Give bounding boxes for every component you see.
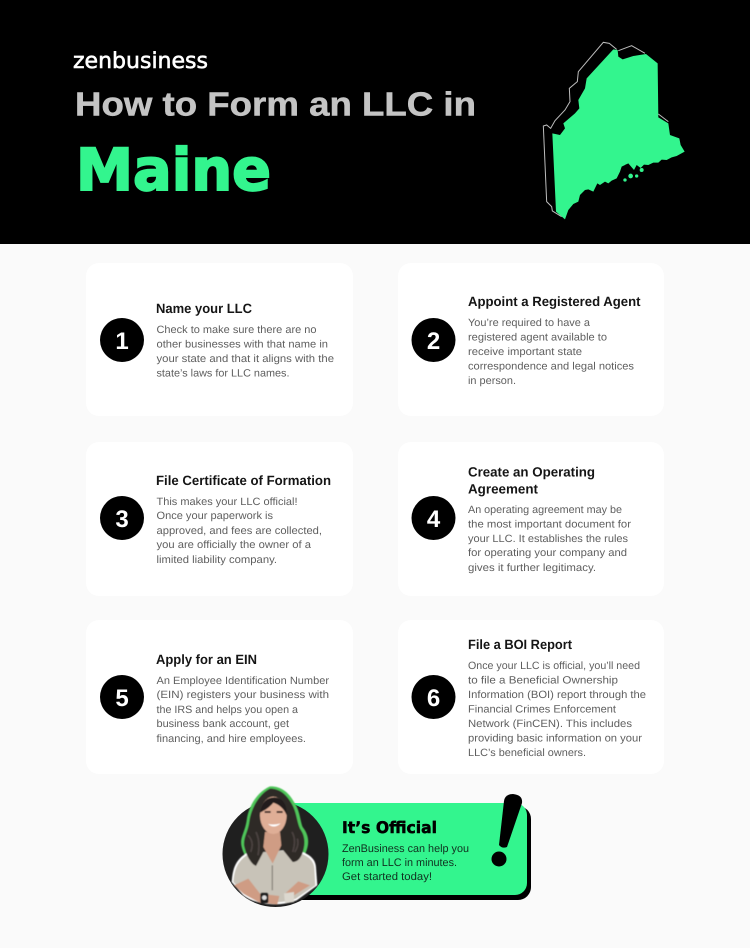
step card 1: your state and that it aligns with the	[156, 353, 334, 365]
step card 2: Appoint a Registered Agent	[468, 294, 641, 309]
step card 4: 4	[427, 506, 441, 533]
step card 3: This makes your LLC official!	[156, 496, 298, 508]
step card 4: Create an Operating	[468, 464, 595, 480]
step card 2: receive important state	[468, 346, 582, 358]
step card 5	[86, 620, 353, 774]
step card 6: 6	[427, 685, 440, 712]
step card 5: business bank account, get	[156, 718, 289, 730]
callout heading: It’s Official	[342, 818, 437, 837]
map: Maine	[543, 42, 685, 219]
step card 2: registered agent available to	[468, 332, 607, 344]
step card 2: in person.	[468, 375, 516, 387]
step card 6: providing basic information on your	[468, 732, 642, 744]
step card 5: the IRS and helps you open a	[156, 704, 298, 716]
step card 2: correspondence and legal notices	[468, 360, 634, 372]
step card 4: your LLC. It establishes the rules	[468, 533, 628, 545]
step card 1: state’s laws for LLC names.	[156, 368, 290, 380]
step card 2	[398, 263, 664, 416]
step card 1	[86, 263, 353, 416]
title line: How to Form an LLC in	[75, 86, 476, 124]
step card 5: (EIN) registers your business with	[156, 689, 329, 701]
step card 1: other businesses with that name in	[156, 338, 328, 350]
step card 6: Once your LLC is official, you’ll need	[468, 660, 640, 672]
step card 6: File a BOI Report	[468, 637, 572, 652]
header band	[0, 0, 750, 244]
step card 3	[86, 442, 353, 596]
step card 6	[398, 620, 664, 774]
step card 1: Name your LLC	[156, 301, 252, 316]
step card 3: you are officially the owner of a	[156, 539, 311, 551]
step card 6: Information (BOI) report through the	[468, 689, 646, 701]
step card 4: for operating your company and	[468, 547, 627, 559]
callout text: ZenBusiness can help you	[342, 843, 469, 855]
step card 3: Once your paperwork is	[156, 510, 273, 522]
step card 4: Agreement	[468, 482, 538, 496]
callout text: Get started today!	[342, 871, 432, 883]
step card 5: financing, and hire employees.	[156, 733, 306, 745]
step card 6: LLC’s beneficial owners.	[468, 747, 586, 759]
step card 2: 2	[427, 328, 440, 355]
callout text: form an LLC in minutes.	[342, 857, 457, 869]
step card 6: Financial Crimes Enforcement	[468, 704, 616, 716]
step card 1: 1	[115, 328, 129, 355]
step card 3: approved, and fees are collected,	[156, 525, 322, 537]
portrait: woman	[232, 786, 317, 905]
step card 3: File Certificate of Formation	[156, 473, 331, 488]
step card 3: limited liability company.	[156, 554, 277, 566]
step card 5: 5	[115, 685, 129, 712]
step card 2: You’re required to have a	[468, 317, 590, 329]
logo: zenbusiness: zenbusiness	[73, 49, 208, 74]
callout text	[342, 843, 469, 883]
step card 3: 3	[115, 506, 129, 533]
step card 1: Check to make sure there are no	[156, 324, 317, 336]
title state name: Maine	[76, 136, 271, 204]
call to action banner	[222, 786, 531, 907]
portrait circle	[222, 801, 328, 907]
step card 4: gives it further legitimacy.	[468, 562, 596, 574]
step card 5: An Employee Identification Number	[156, 675, 329, 687]
step card 4: the most important document for	[468, 518, 631, 530]
step card 5: Apply for an EIN	[156, 652, 257, 667]
step card 4: An operating agreement may be	[468, 504, 622, 516]
step card 6: Network (FinCEN). This includes	[468, 718, 632, 730]
step card 6: to file a Beneficial Ownership	[468, 674, 618, 686]
step card 4	[398, 442, 664, 596]
icon: exclamation mark	[492, 794, 522, 866]
